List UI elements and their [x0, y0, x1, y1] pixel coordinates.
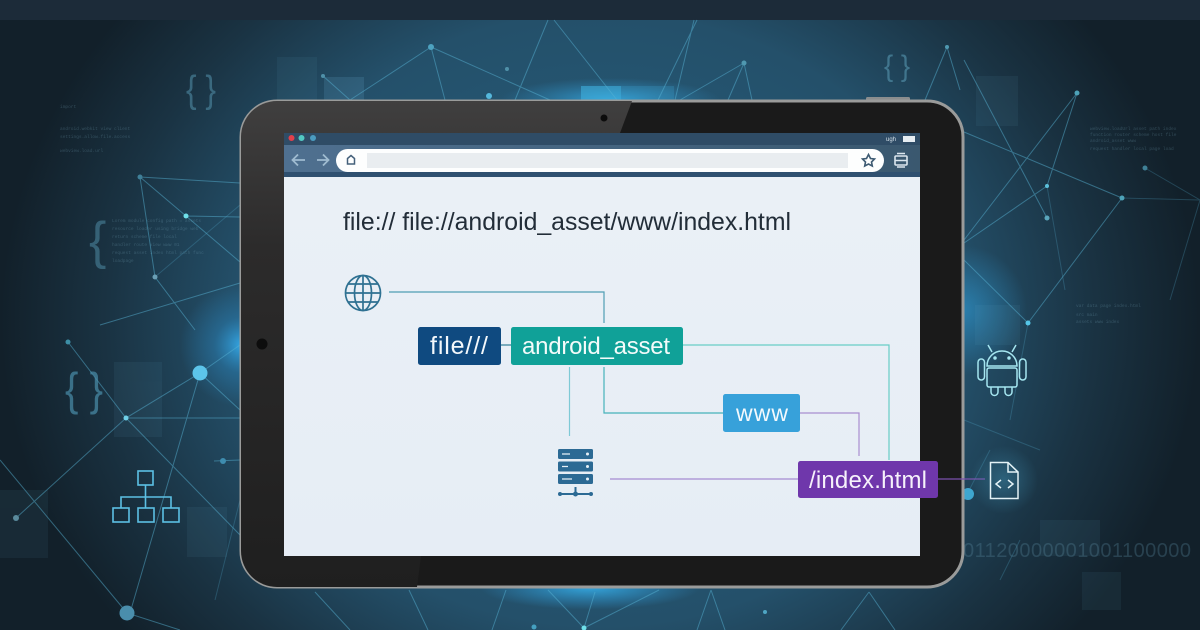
star icon	[862, 154, 874, 166]
box: file	[418, 327, 501, 365]
icon: curly braces lower left: { }	[65, 363, 103, 415]
power button	[866, 97, 910, 103]
battery status: ugh	[886, 137, 896, 143]
decorative code text: loadpage	[112, 258, 134, 264]
camera top	[600, 114, 608, 122]
box: android_asset	[511, 327, 683, 365]
box: android_asset: android_asset	[522, 333, 670, 360]
battery status	[886, 136, 915, 143]
decorative code text: webview.loadUrl asset path index	[1090, 126, 1177, 132]
box: www	[723, 394, 800, 432]
tabs icon	[895, 154, 907, 167]
icon: server	[558, 449, 593, 496]
screen	[284, 133, 985, 556]
decorative code text: return scheme file local	[112, 234, 177, 240]
address bar	[336, 149, 884, 172]
tablet	[241, 97, 985, 587]
decorative code text: request asset index html path func	[112, 250, 204, 256]
connector lines	[389, 292, 985, 479]
back arrow	[292, 154, 305, 166]
camera side	[256, 338, 268, 350]
decorative code text: function router scheme host file	[1090, 132, 1177, 138]
decorative code text: Lorem module config path = assets	[112, 218, 201, 224]
icon: org chart	[113, 471, 179, 522]
icon: html file	[970, 446, 1038, 514]
forward arrow	[317, 154, 328, 166]
window dots	[288, 135, 316, 141]
box: file: file///	[430, 332, 488, 360]
decorative code text: handler route view www 01	[112, 242, 180, 248]
decorative code text: settings.allow.file.access	[60, 134, 131, 140]
browser status bar	[284, 133, 920, 145]
decorative code text: resource loader using bridge web	[112, 226, 199, 232]
icon: curly braces top: { }	[186, 69, 216, 111]
bezel gloss	[241, 101, 632, 587]
decorative code text: assets www index	[1076, 319, 1120, 325]
icon: curly brace left: {	[89, 212, 106, 270]
icon: android robot	[978, 345, 1026, 396]
icon: curly braces top right: { }	[884, 50, 910, 83]
decorative code text: import	[60, 104, 77, 110]
url heading: file:// file://android_asset/www/index.html	[343, 208, 791, 236]
box: www: www	[735, 400, 788, 426]
icon: globe	[346, 276, 380, 310]
browser toolbar	[284, 145, 920, 177]
tablet body	[241, 101, 963, 587]
decorative code text: webview.load.url	[60, 148, 104, 154]
decorative code text: var data page index.html	[1076, 303, 1141, 309]
box: index.html: /index.html	[809, 467, 927, 494]
browser page	[284, 177, 920, 556]
decorative code text: src main	[1076, 312, 1098, 318]
faint network lines	[155, 168, 1200, 600]
decorative code text	[60, 104, 1177, 325]
home icon	[348, 156, 354, 164]
decorative code text: android.webkit view client	[60, 126, 131, 132]
decorative code text: request handler local page load	[1090, 146, 1174, 152]
decorative binary text: 01120000001001100000	[963, 540, 1191, 562]
box: index.html	[798, 461, 938, 498]
decorative code text: android_asset www	[1090, 138, 1136, 144]
